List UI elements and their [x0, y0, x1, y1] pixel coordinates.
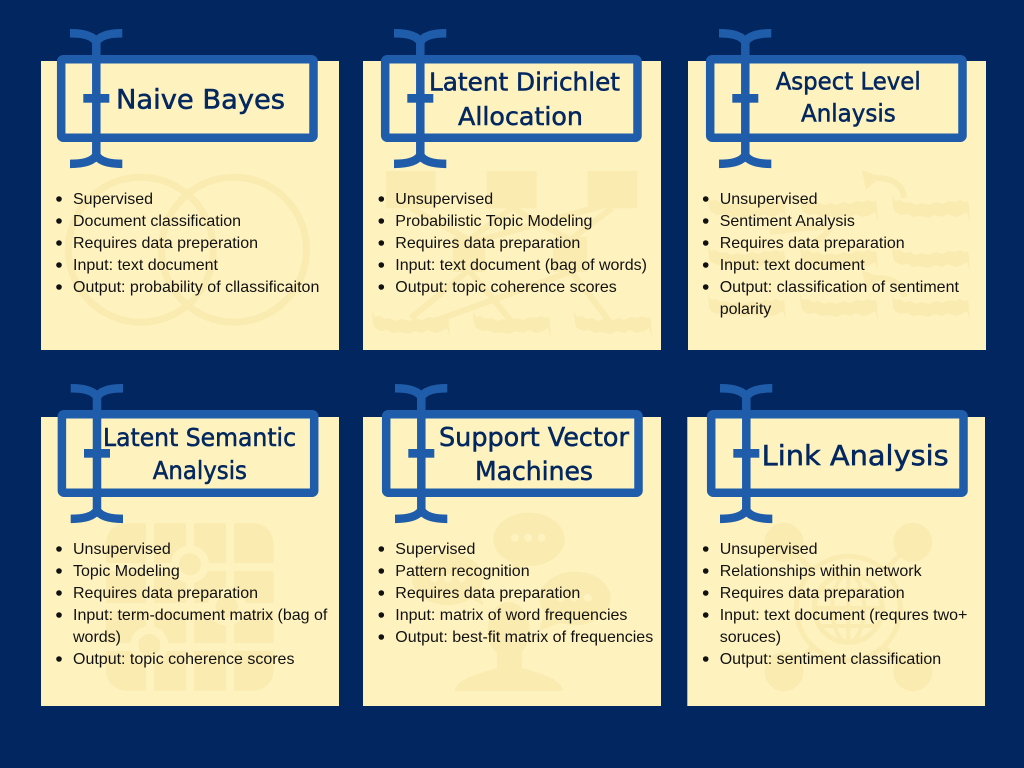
list: Link Analysis properties: Input: text document (requres two+ — [720, 607, 967, 624]
panel: Latent Semantic Analysis — [41, 388, 339, 706]
heading: Naive Bayes: Naive Bayes — [116, 84, 285, 115]
heading: Latent Dirichlet Allocation: Latent Dirichlet — [429, 68, 620, 97]
list: Link Analysis properties — [703, 541, 967, 668]
frame: text cursor box — [61, 33, 314, 164]
heading: Support Vector Machines — [439, 423, 629, 487]
list: Aspect Level Analysis properties: Sentiment Analysis — [720, 213, 855, 230]
icon: linked globe network — [764, 523, 932, 691]
list: Latent Dirichlet Allocation properties — [378, 191, 647, 296]
panel: Aspect Level Analysis — [688, 33, 986, 350]
list: Link Analysis properties: Requires data preparation — [720, 585, 905, 602]
frame: text cursor box — [62, 388, 314, 519]
list: Naive Bayes properties: Input: text document — [73, 257, 219, 274]
list: Support Vector Machines properties: Output: best-fit matrix of frequencies — [395, 629, 653, 646]
list: Latent Semantic Analysis properties — [56, 541, 328, 668]
list: Latent Dirichlet Allocation properties: Requires data preparation — [395, 235, 580, 252]
frame: text cursor box — [710, 33, 962, 164]
heading: Latent Semantic Analysis — [103, 423, 296, 485]
list: Support Vector Machines properties: Requires data preparation — [395, 585, 580, 602]
list: Latent Semantic Analysis properties: Requires data preparation — [73, 585, 258, 602]
list: Latent Semantic Analysis properties: Topic Modeling — [73, 563, 180, 580]
list: Naive Bayes properties: Requires data preperation — [73, 235, 258, 252]
icon: text lines with arrows — [708, 170, 970, 321]
icon: overlapping circles — [68, 177, 306, 322]
list: Link Analysis properties: Relationships within network — [720, 563, 923, 580]
list: Latent Dirichlet Allocation properties: Probabilistic Topic Modeling — [395, 213, 592, 230]
list: Support Vector Machines properties: Supervised — [395, 541, 475, 558]
panel: Latent Dirichlet Allocation — [363, 33, 661, 350]
list: Aspect Level Analysis properties: Unsupervised — [720, 191, 818, 208]
list: Aspect Level Analysis properties: Requires data preparation — [720, 235, 905, 252]
icon: topic model network — [372, 171, 652, 338]
list: Naive Bayes properties: Output: probability of cllassificaiton — [73, 279, 319, 296]
list: Link Analysis properties: soruces) — [720, 629, 781, 646]
list: Latent Dirichlet Allocation properties: Unsupervised — [395, 191, 493, 208]
heading: Latent Semantic Analysis: Latent Semantic — [103, 423, 296, 452]
list: Latent Semantic Analysis properties: Unsupervised — [73, 541, 171, 558]
list: Aspect Level Analysis properties: polarity — [720, 301, 771, 318]
icon: matrix grid — [106, 523, 274, 691]
frame: text cursor box — [385, 33, 638, 164]
list: Latent Semantic Analysis properties: Output: topic coherence scores — [73, 651, 294, 668]
heading: Latent Dirichlet Allocation — [429, 68, 620, 131]
panel: Link Analysis — [687, 388, 985, 706]
list: Support Vector Machines properties: Input: matrix of word frequencies — [395, 607, 627, 624]
list: Naive Bayes properties: Document classification — [73, 213, 241, 230]
heading: Support Vector Machines: Support Vector — [439, 423, 629, 453]
heading: Aspect Level Analysis: Anlaysis — [801, 100, 896, 128]
list: Aspect Level Analysis properties: Input: text document — [720, 257, 865, 274]
heading: Support Vector Machines: Machines — [475, 457, 593, 487]
frame: text cursor box — [386, 388, 638, 519]
list: Naive Bayes properties: Supervised — [73, 191, 153, 208]
list: Support Vector Machines properties — [378, 541, 653, 646]
heading: Latent Dirichlet Allocation: Allocation — [458, 102, 583, 131]
list: Latent Dirichlet Allocation properties: Output: topic coherence scores — [395, 279, 617, 296]
icon: person with speech bubbles — [412, 513, 611, 691]
heading: Aspect Level Analysis — [776, 67, 921, 128]
frame: text cursor box — [711, 388, 964, 519]
panel: Naive Bayes — [41, 33, 339, 350]
heading: Aspect Level Analysis: Aspect Level — [776, 67, 921, 95]
list: Latent Semantic Analysis properties: Input: term-document matrix (bag of — [73, 607, 328, 624]
panel: Support Vector Machines — [363, 388, 661, 706]
list: Naive Bayes properties — [56, 191, 319, 296]
list: Link Analysis properties: Output: sentiment classification — [720, 651, 941, 668]
list: Link Analysis properties: Unsupervised — [720, 541, 818, 558]
list: Latent Semantic Analysis properties: words) — [72, 629, 121, 646]
list: Aspect Level Analysis properties — [703, 191, 959, 318]
heading: Latent Semantic Analysis: Analysis — [153, 456, 247, 485]
list: Support Vector Machines properties: Pattern recognition — [395, 563, 530, 580]
list: Aspect Level Analysis properties: Output: classification of sentiment — [720, 279, 959, 296]
list: Latent Dirichlet Allocation properties: Input: text document (bag of words) — [395, 257, 647, 274]
heading: Link Analysis: Link Analysis — [762, 439, 949, 472]
